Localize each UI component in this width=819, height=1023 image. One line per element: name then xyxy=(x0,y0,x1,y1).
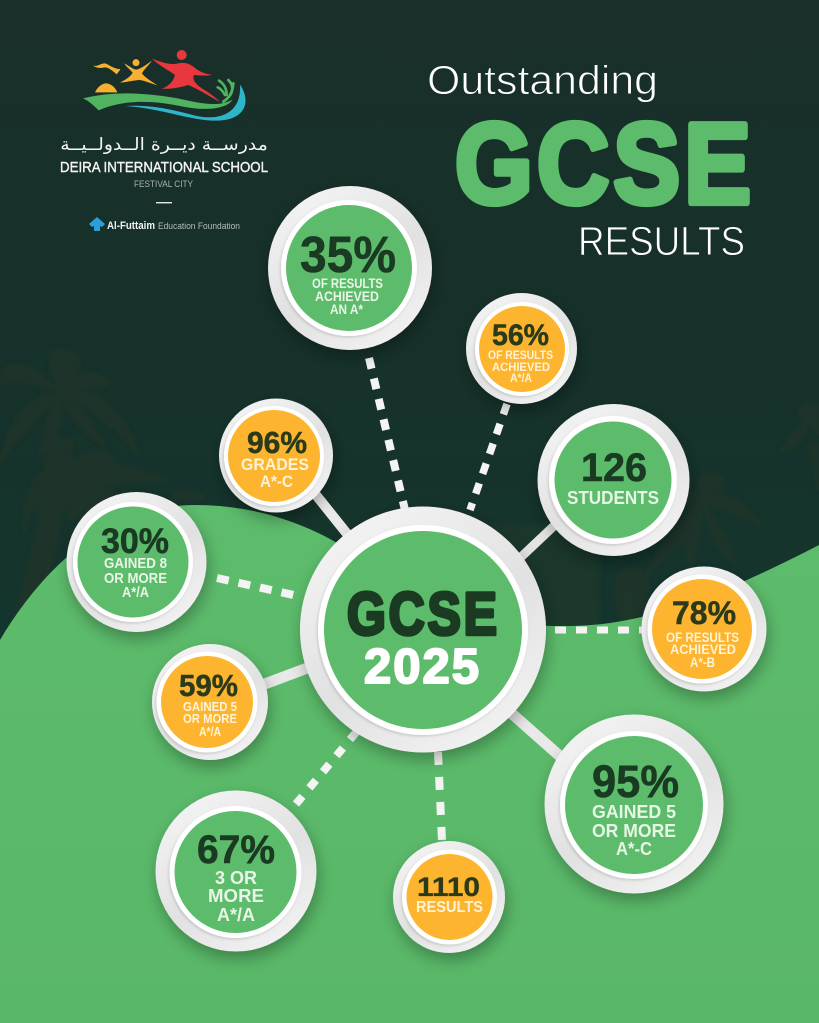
background: palm silhouettes xyxy=(0,349,819,635)
stat: 67%: MORE xyxy=(208,885,264,906)
central hub: GCSE 2025: 2025 xyxy=(364,640,479,694)
stat: 67%: A*/A xyxy=(217,904,255,925)
stat: 96% xyxy=(219,398,333,512)
stat: 59% xyxy=(152,644,268,760)
stat: 59%: GAINED 5 xyxy=(183,700,237,714)
connectors xyxy=(217,358,642,841)
stat: 59%: 59% xyxy=(179,668,238,703)
stat: 30% xyxy=(66,492,206,632)
stat: 96%: A*-C xyxy=(260,473,293,491)
stat: 78%: ACHIEVED xyxy=(670,642,736,657)
connector: 56% dashed xyxy=(470,404,507,510)
campus name: FESTIVAL CITY xyxy=(134,179,193,189)
school name english: DEIRA INTERNATIONAL SCHOOL xyxy=(60,160,268,176)
foundation logo: Education Foundation xyxy=(158,221,240,232)
logo: red figure xyxy=(152,50,220,102)
logo xyxy=(83,50,246,121)
stat: 35% xyxy=(268,186,432,350)
stat: 30%: OR MORE xyxy=(104,570,167,587)
school name arabic: مدرســة ديــرة الــدولــيــة xyxy=(60,135,268,155)
stat: 126 students: STUDENTS xyxy=(567,488,659,508)
stat: 56%: OF RESULTS xyxy=(488,348,553,362)
icon: foundation mark xyxy=(89,217,105,231)
stat: 1110 results: RESULTS xyxy=(416,899,483,916)
stat: 30%: A*/A xyxy=(122,584,149,601)
connector: 35% dashed xyxy=(369,358,405,510)
stat: 35%: OF RESULTS xyxy=(312,275,383,291)
stat: 78%: OF RESULTS xyxy=(666,630,739,645)
stat: 95%: OR MORE xyxy=(592,820,676,841)
stat: 67% xyxy=(156,790,316,952)
stat: 56%: A*/A xyxy=(510,371,532,385)
stat: 1110 results xyxy=(393,841,505,953)
stat: 126 students: 126 xyxy=(581,446,647,490)
connector: 78% dashed xyxy=(555,626,642,634)
background: faint building xyxy=(475,525,600,630)
connector: 59% solid xyxy=(262,667,310,685)
central hub: GCSE 2025: GCSE xyxy=(347,580,497,648)
logo: green wave xyxy=(83,93,233,110)
stat: 96%: GRADES xyxy=(241,456,309,474)
stat: 35%: 35% xyxy=(300,226,396,283)
stat: 56%: 56% xyxy=(492,319,549,352)
stat: 56% xyxy=(466,293,577,404)
stat: 126 students xyxy=(538,404,690,556)
stat: 35%: ACHIEVED xyxy=(315,288,379,304)
stat: 96%: 96% xyxy=(247,425,307,460)
stat: 30%: 30% xyxy=(101,522,169,561)
stat: 35%: AN A* xyxy=(330,301,363,317)
title: results: RESULTS xyxy=(578,218,745,264)
stat: 67%: 67% xyxy=(197,828,275,872)
green hill xyxy=(0,505,819,1023)
stat: 30%: GAINED 8 xyxy=(104,555,167,572)
foundation logo xyxy=(89,217,240,232)
stat: 1110 results: 1110 xyxy=(417,872,480,902)
connector: 126 solid xyxy=(520,524,556,558)
stat: 59%: OR MORE xyxy=(183,712,237,726)
stat: 78%: 78% xyxy=(672,595,736,631)
stat: 95%: A*-C xyxy=(616,838,652,859)
connector: 1110 dashed xyxy=(438,752,442,841)
foundation logo: Al-Futtaim xyxy=(107,220,155,232)
central hub: GCSE 2025 xyxy=(300,506,546,752)
connector: 67% dashed xyxy=(296,730,358,804)
stat: 95%: GAINED 5 xyxy=(592,801,676,822)
stat: 67%: 3 OR xyxy=(215,867,257,888)
title: outstanding: Outstanding xyxy=(427,57,658,103)
connector: 95% solid xyxy=(510,712,562,758)
connector: 30% dashed xyxy=(217,578,298,596)
stat: 56%: ACHIEVED xyxy=(492,360,550,374)
stat: 78%: A*-B xyxy=(690,655,715,670)
stat: 95% xyxy=(544,714,724,894)
stat: 78% xyxy=(642,566,766,692)
logo: yellow figure xyxy=(93,59,158,92)
title: GCSE: GCSE xyxy=(455,100,751,227)
stat: 59%: A*/A xyxy=(199,725,221,739)
logo: palm xyxy=(218,80,233,102)
logo: blue wave xyxy=(126,85,246,121)
stat: 95%: 95% xyxy=(592,756,679,807)
connector: 96% solid xyxy=(316,495,348,535)
